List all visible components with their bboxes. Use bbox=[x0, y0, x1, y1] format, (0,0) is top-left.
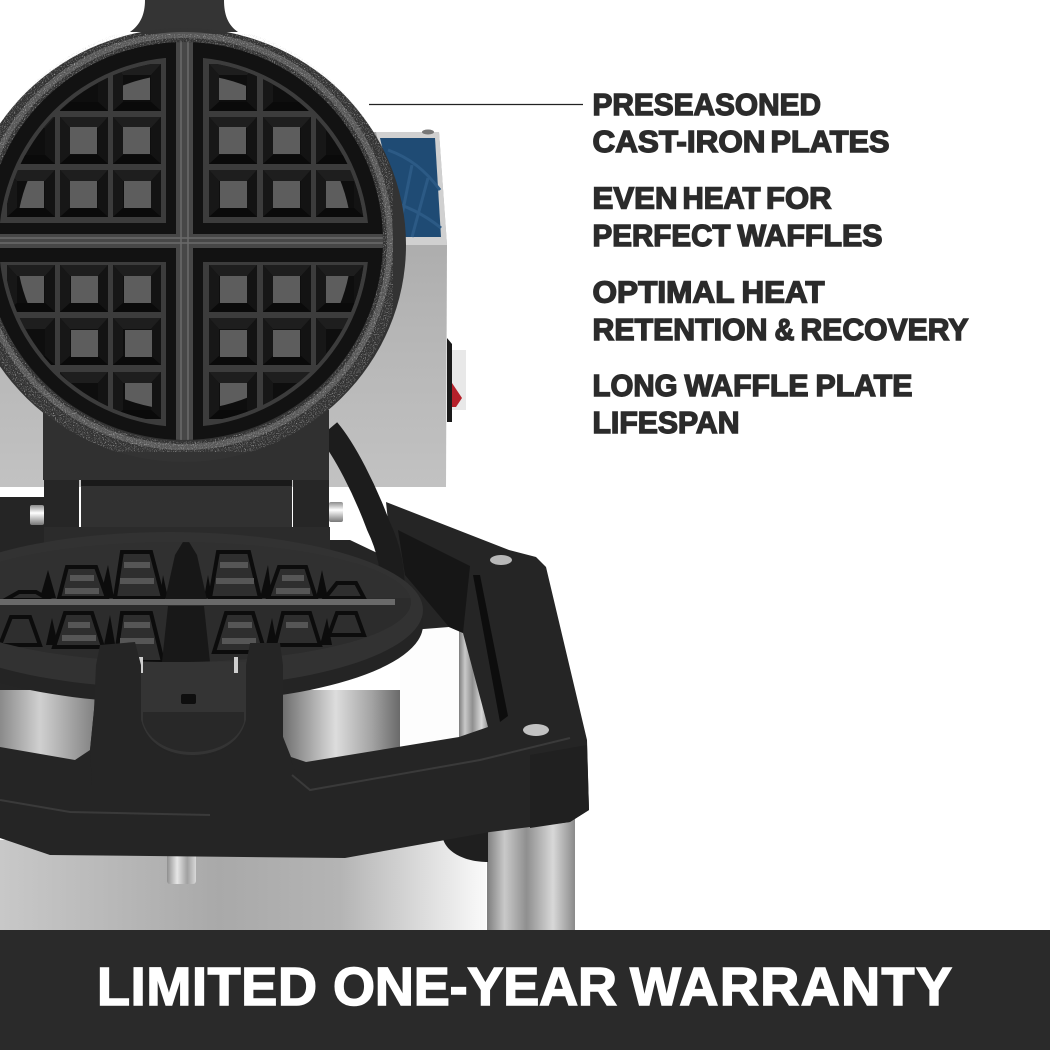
panel screw bbox=[422, 130, 434, 134]
front fork of frame bbox=[90, 642, 300, 785]
power switch bbox=[447, 338, 466, 422]
leg collar shadow bbox=[442, 826, 488, 862]
feature: even heat: HEAT bbox=[682, 182, 761, 216]
ridge spikes bbox=[40, 565, 332, 650]
feature list bbox=[592, 88, 968, 440]
feature: preseasoned plates: PRESEASONED bbox=[592, 88, 821, 122]
feature: plate lifespan: PLATE bbox=[816, 369, 912, 403]
feature: preseasoned plates: CAST-IRON bbox=[592, 125, 766, 159]
cast-iron rim speckle bbox=[0, 34, 393, 452]
feature: even heat: FOR bbox=[766, 182, 832, 216]
frame highlight bbox=[0, 738, 570, 815]
screw: front corner bbox=[523, 724, 549, 736]
hinge assembly bbox=[30, 478, 343, 552]
steel base body bbox=[0, 620, 489, 930]
blue control panel bbox=[380, 138, 441, 237]
feature: heat retention bbox=[592, 276, 968, 347]
feature: plate lifespan: LONG bbox=[592, 369, 678, 403]
latch plate bbox=[139, 657, 246, 755]
warranty text: LIMITED bbox=[97, 957, 317, 1017]
control panel bezel bbox=[376, 132, 447, 245]
plate raised squares bbox=[17, 75, 353, 407]
centre ribs bbox=[166, 542, 207, 599]
feature: even heat bbox=[592, 182, 882, 253]
front leg bbox=[487, 815, 575, 930]
warranty text: ONE-YEAR bbox=[333, 957, 617, 1017]
front corner shading bbox=[530, 745, 589, 828]
upper handle stem bbox=[130, 0, 238, 32]
leader line bbox=[369, 104, 583, 106]
feature: plate lifespan bbox=[592, 369, 912, 440]
feature: heat retention: RECOVERY bbox=[800, 313, 968, 347]
centre stem bbox=[167, 850, 196, 884]
feature: preseasoned plates bbox=[592, 88, 890, 159]
warranty banner bbox=[0, 930, 1050, 1050]
feature: heat retention: HEAT bbox=[742, 276, 825, 310]
frame arm inner face bbox=[398, 530, 470, 633]
feature: plate lifespan: WAFFLE bbox=[684, 369, 808, 403]
feature: heat retention: & bbox=[774, 313, 794, 347]
upper waffle plate bbox=[0, 28, 406, 462]
lower plate waffle ridges bbox=[0, 542, 395, 662]
plate quadrant frames bbox=[0, 58, 379, 427]
waffle maker rear housing bbox=[0, 130, 466, 487]
feature: heat retention: OPTIMAL bbox=[592, 276, 734, 310]
screw: rear arm bbox=[490, 555, 512, 565]
frame arm groove bbox=[473, 575, 508, 722]
plate cross ribs bbox=[0, 40, 385, 440]
feature: even heat: EVEN bbox=[592, 182, 678, 216]
warranty text bbox=[97, 957, 952, 1017]
feature: heat retention: RETENTION bbox=[592, 313, 768, 347]
lower waffle plate bbox=[0, 532, 423, 703]
feature: even heat: PERFECT bbox=[592, 219, 731, 253]
cast base frame bbox=[0, 497, 589, 858]
neck below upper plate bbox=[43, 410, 329, 480]
warranty text: WARRANTY bbox=[630, 957, 952, 1017]
feature: plate lifespan: LIFESPAN bbox=[592, 406, 740, 440]
feature: preseasoned plates: PLATES bbox=[770, 125, 890, 159]
rear leg bbox=[459, 630, 489, 738]
power cord bbox=[328, 430, 393, 595]
plate dark pockets bbox=[7, 64, 364, 419]
feature: even heat: WAFFLES bbox=[738, 219, 882, 253]
